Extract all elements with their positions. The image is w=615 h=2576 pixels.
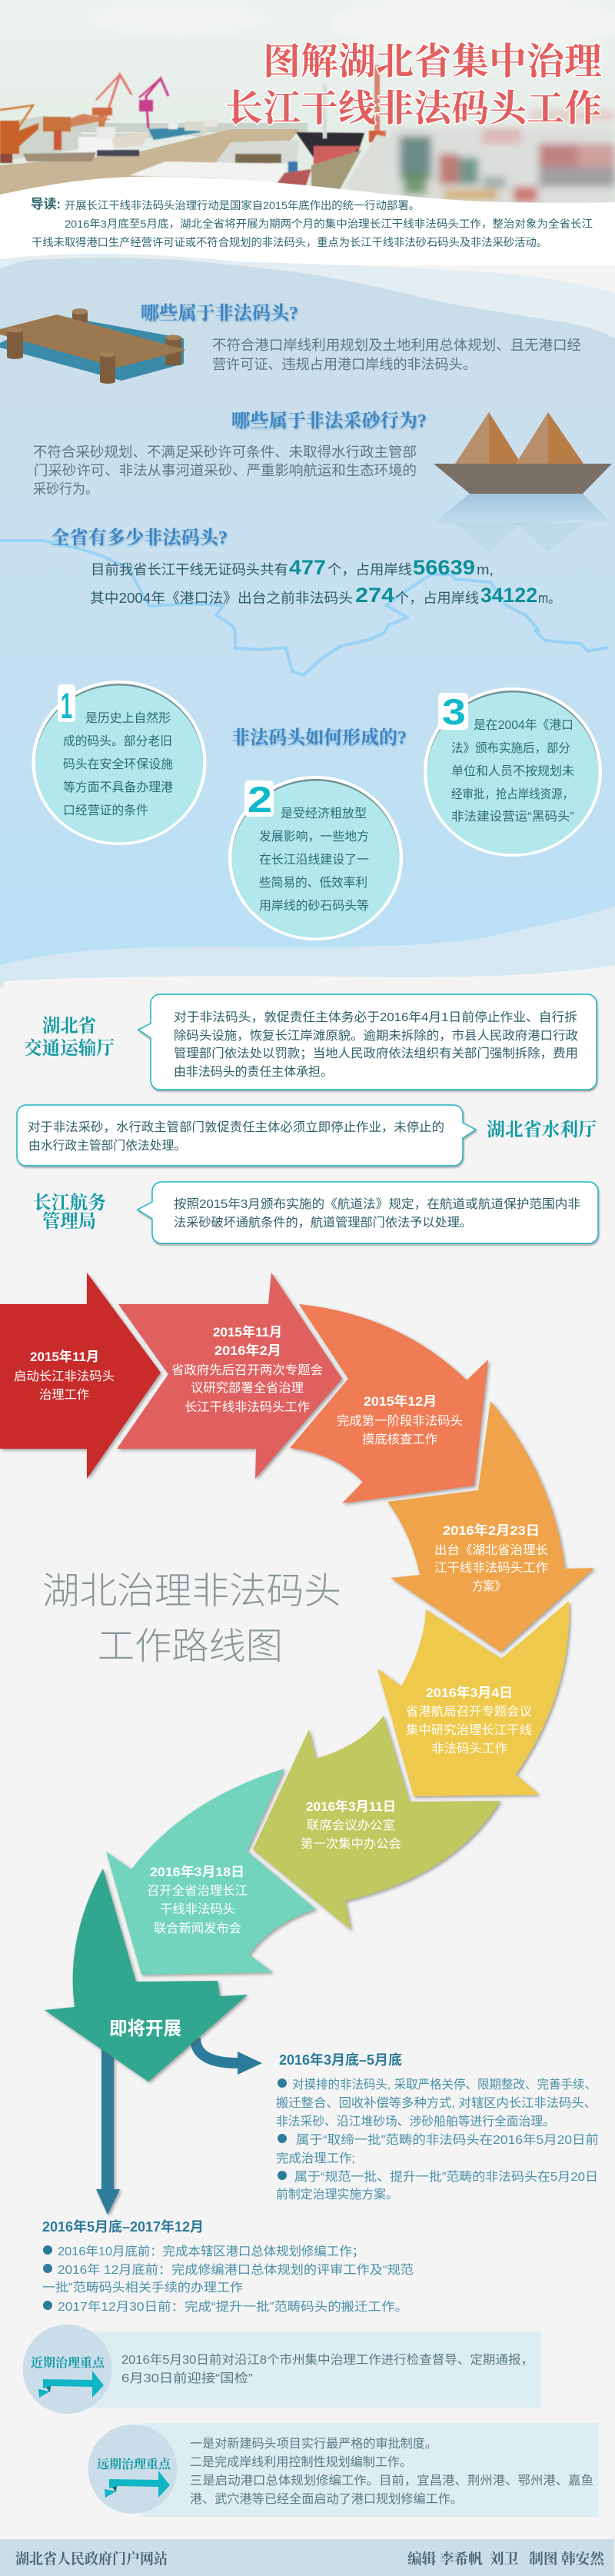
- river map lines: [0, 541, 608, 675]
- arrow step 4: 2016-02-23: [387, 1401, 594, 1652]
- arrow step 2: 2015-11 to 2016-02: 省政府先后召开两次专题会: [171, 1363, 323, 1377]
- circle 1: [32, 681, 206, 845]
- intro text: 2016年3月底至5月底，湖北全省将开展为期两个月的集中治理长江干线非法码头工作，整治对象为全省长江: [65, 218, 593, 230]
- text: statistics: 个，占用岸线: [395, 591, 479, 606]
- heading: how docks formed: 非法码头如何形成的?: [231, 727, 407, 748]
- circle 1: 是历史上自然形: [85, 711, 171, 725]
- title: 长江干线非法码头工作: [225, 88, 602, 129]
- circle 3: 3: [442, 691, 466, 732]
- arrow step 7: 2016-03-18: 召开全省治理长江: [147, 1884, 248, 1898]
- icon: ribbon arrow: [98, 2471, 170, 2498]
- panel: Yangtze navigation bureau: [33, 1182, 598, 1243]
- intro text: 开展长江干线非法码头治理行动是国家自2015年底作出的统一行动部署。: [65, 199, 420, 211]
- list: May 2016 to December 2017 actions: 2016年 12月底前：完成修编港口总体规划的评审工作及“规范: [58, 2263, 414, 2277]
- heading: what are illegal docks: 哪些属于非法码头?: [141, 303, 298, 324]
- panel: transport department: 管理部门依法处以罚款；当地人民政府依法组织有关部门强制拆除，费用: [174, 1047, 578, 1060]
- panel: near-term focus: 近期治理重点: [31, 2355, 105, 2370]
- arrow step 6: 2016-03-11: 第一次集中办公会: [301, 1837, 401, 1851]
- circle 3: 是在2004年《港口: [474, 718, 573, 732]
- arrow step 8: upcoming: [45, 1869, 248, 2082]
- roadmap title: 湖北治理非法码头: [42, 1560, 341, 1614]
- circle 1: 1: [61, 685, 72, 726]
- arrow step 6: 2016-03-11: [253, 1716, 500, 1930]
- list: March to May actions: [276, 2052, 599, 2202]
- list: May 2016 to December 2017 actions: [42, 2218, 414, 2314]
- panel: long-term focus: [88, 2423, 599, 2517]
- circle 3: 经审批，抢占岸线资源，: [451, 787, 573, 801]
- text: statistics: 34122: [480, 584, 537, 607]
- title: [225, 42, 602, 129]
- band between blue panel and grey area: [0, 906, 615, 987]
- text: statistics: 其中2004年《港口法》出台之前非法码头: [90, 591, 353, 606]
- list: March to May actions: 属于“规范一批、提升一批”范畴的非法码头在5月20日: [294, 2170, 598, 2184]
- arrow step 5: 2016-03-04: 省港航局召开专题会议: [406, 1705, 532, 1719]
- list: May 2016 to December 2017 actions: 2016年5月底–2017年12月: [42, 2218, 204, 2235]
- arrow step 6: 2016-03-11: 2016年3月11日: [306, 1799, 396, 1814]
- arrow step 5: 2016-03-04: [377, 1601, 569, 1796]
- arrow step 7: 2016-03-18: 联合新闻发布会: [154, 1922, 241, 1935]
- circle 3: 非法建设营运“黑码头”: [451, 810, 574, 824]
- panel: transport department: 湖北省: [42, 1016, 97, 1037]
- circle 2: 在长江沿线建设了一: [259, 853, 369, 867]
- circle 2: 用岸线的砂石码头等: [259, 899, 369, 913]
- intro text: [31, 197, 593, 248]
- arrow step 4: 2016-02-23: 方案》: [472, 1579, 506, 1593]
- text: statistics: 477: [289, 556, 326, 579]
- title: 图解湖北省集中治理: [263, 42, 602, 82]
- circle 1: 码头在安全环保设施: [63, 757, 173, 771]
- footer: 编辑 李希帆 刘卫 制图 韩安然: [407, 2550, 605, 2568]
- grey lower background: [0, 965, 615, 2576]
- arrow step 1: 2015-11: 治理工作: [39, 1388, 89, 1402]
- panel: transport department: 对于非法码头，敦促责任主体务必于2016年4月1日前停止作业、自行拆: [174, 1010, 577, 1024]
- arrow step 3: 2015-12: [290, 1304, 488, 1503]
- white wave under hero: [0, 177, 615, 265]
- circle 3: 法》颁布实施后，部分: [451, 741, 570, 755]
- footer: [0, 2539, 614, 2576]
- icon: sand boat: [434, 412, 612, 552]
- text: statistics: m。: [538, 591, 560, 606]
- text: statistics: 56639: [413, 556, 475, 579]
- arrow step 4: 2016-02-23: 江干线非法码头工作: [434, 1561, 548, 1575]
- footer: 湖北省人民政府门户网站: [15, 2551, 168, 2568]
- arrow step 5: 2016-03-04: 集中研究治理长江干线: [406, 1723, 532, 1737]
- panel: near-term focus: [23, 2325, 541, 2414]
- panel: near-term focus: 6月30日前迎接“国检”: [121, 2371, 253, 2385]
- heading: how many illegal docks: 全省有多少非法码头?: [51, 528, 228, 548]
- arrow step 1: 2015-11: [0, 1273, 161, 1479]
- text: statistics: 目前我省长江干线无证码头共有: [91, 562, 288, 577]
- circle 2: 发展影响，一些地方: [259, 830, 369, 844]
- panel: long-term focus: 一是对新建码头项目实行最严格的审批制度。: [190, 2437, 437, 2451]
- hero photo: port and river: [0, 0, 615, 208]
- text: illegal sand mining definition: 门采砂许可、非法从事河道采砂、严重影响航运和生态环境的: [34, 463, 417, 478]
- panel: water resources department: 由水行政主管部门依法处理。: [28, 1139, 186, 1153]
- text: illegal sand mining definition: [33, 444, 417, 497]
- arrow step 4: 2016-02-23: 2016年2月23日: [443, 1523, 540, 1538]
- panel: Yangtze navigation bureau: 长江航务: [33, 1193, 106, 1213]
- arrow step 7: 2016-03-18: 干线非法码头: [160, 1902, 235, 1916]
- list: March to May actions: 属于“取缔一批”范畴的非法码头在2016年5月20日前: [296, 2133, 599, 2147]
- icon: ribbon arrow: [32, 2371, 104, 2398]
- panel: long-term focus: 港、武穴港等已经全面启动了港口规划修编工作。: [190, 2492, 463, 2506]
- arrow step 8: upcoming: 即将开展: [109, 2019, 181, 2039]
- arrow step 1: 2015-11: 2015年11月: [30, 1349, 99, 1364]
- panel: water resources department: 对于非法采砂，水行政主管部门敦促责任主体必须立即停止作业，未停止的: [28, 1120, 444, 1134]
- panel: long-term focus: 三是启动港口总体规划修编工作。目前，宜昌港、荆州港、鄂州港、嘉鱼: [190, 2474, 593, 2488]
- text: statistics: [90, 556, 560, 607]
- intro text: 导读:: [31, 197, 61, 211]
- circle 2: 2: [248, 779, 272, 820]
- circle 3: [424, 687, 602, 857]
- arrow step 3: 2015-12: 2015年12月: [364, 1393, 437, 1409]
- text: statistics: m,: [477, 562, 494, 577]
- circle 3: 单位和人员不按规划未: [451, 764, 574, 778]
- arrow step 1: 2015-11: 启动长江非法码头: [14, 1370, 115, 1383]
- roadmap title: 工作路线图: [98, 1616, 283, 1669]
- list: March to May actions: 对摸排的非法码头, 采取严格关停、限期整改、完善手续、: [292, 2078, 597, 2092]
- panel: transport department: [24, 994, 597, 1090]
- panel: long-term focus: 二是完成岸线利用控制性规划编制工作。: [190, 2455, 412, 2469]
- panel: transport department: 交通运输厅: [24, 1038, 115, 1059]
- panel: Yangtze navigation bureau: 法采砂破坏通航条件的，航道管理部门依法予以处理。: [174, 1216, 472, 1230]
- arrow step 2: 2015-11 to 2016-02: [117, 1273, 342, 1479]
- arrow step 7: 2016-03-18: [106, 1769, 316, 1975]
- list: March to May actions: 前制定治理实施方案。: [276, 2188, 398, 2202]
- list: March to May actions: 非法采砂、沿江堆砂场、涉砂船舶等进行全面治理。: [276, 2115, 555, 2128]
- arrow step 7: 2016-03-18: 2016年3月18日: [150, 1864, 244, 1879]
- text: illegal dock definition: [212, 338, 581, 372]
- heading: illegal sand mining: 哪些属于非法采砂行为?: [231, 411, 427, 431]
- list: May 2016 to December 2017 actions: 2016年10月底前：完成本辖区港口总体规划修编工作；: [58, 2245, 364, 2258]
- arrow step 5: 2016-03-04: 2016年3月4日: [426, 1685, 513, 1700]
- circle 1: 口经营证的条件: [63, 804, 148, 817]
- circle 1: 成的码头。部分老旧: [63, 734, 172, 748]
- arrow step 4: 2016-02-23: 出台《湖北省治理长: [434, 1543, 548, 1557]
- circle 2: 是受经济粗放型: [281, 807, 367, 820]
- blurred container yard: [388, 110, 615, 208]
- panel: Yangtze navigation bureau: 管理局: [42, 1211, 96, 1232]
- circle 1: 等方面不具备办理港: [63, 780, 173, 794]
- panel: near-term focus: 2016年5月30日前对沿江8个市州集中治理工作进行检查督导、定期通报，: [121, 2353, 534, 2367]
- list: March to May actions: 2016年3月底–5月底: [279, 2052, 402, 2068]
- arrow step 2: 2015-11 to 2016-02: 议研究部署全省治理: [191, 1381, 304, 1395]
- arrow step 2: 2015-11 to 2016-02: 2016年2月: [214, 1343, 281, 1358]
- arrow step 3: 2015-12: 完成第一阶段非法码头: [337, 1414, 463, 1428]
- icon: dock: [0, 308, 186, 384]
- arrow step 2: 2015-11 to 2016-02: 2015年11月: [213, 1324, 282, 1340]
- arrow step 5: 2016-03-04: 非法码头工作: [431, 1742, 507, 1756]
- list: March to May actions: 搬迁整合、回收补偿等多种方式, 对辖区内长江非法码头、: [276, 2096, 597, 2110]
- circle 2: 些简易的、低效率利: [259, 876, 367, 890]
- panel: water resources department: [17, 1105, 597, 1166]
- arrow step 2: 2015-11 to 2016-02: 长江干线非法码头工作: [184, 1400, 310, 1414]
- list: May 2016 to December 2017 actions: 一批”范畴码头相关手续的办理工作: [42, 2281, 243, 2295]
- list: March to May actions: 完成治理工作;: [276, 2152, 355, 2165]
- text: illegal sand mining definition: 不符合采砂规划、不满足采砂许可条件、未取得水行政主管部: [33, 444, 417, 460]
- text: illegal sand mining definition: 采砂行为。: [33, 481, 98, 497]
- panel: Yangtze navigation bureau: 按照2015年3月颁布实施的《航道法》规定，在航道或航道保护范围内非: [174, 1197, 580, 1211]
- blue background panel: [0, 254, 615, 992]
- straight blue arrow to long-term list: [96, 2045, 120, 2215]
- list: May 2016 to December 2017 actions: 2017年12月30日前：完成“提升一批”范畴码头的搬迁工作。: [58, 2300, 408, 2314]
- arrow step 3: 2015-12: 摸底核查工作: [362, 1433, 437, 1446]
- curved blue arrow to near-term list: [195, 2038, 262, 2075]
- circle 2: [228, 776, 403, 940]
- text: statistics: 274: [355, 584, 394, 607]
- panel: water resources department: 湖北省水利厅: [487, 1120, 597, 1140]
- panel: transport department: 除码头设施，恢复长江岸滩原貌。逾期未拆除的，市县人民政府港口行政: [174, 1029, 578, 1043]
- intro text: 干线未取得港口生产经营许可证或不符合规划的非法码头，重点为长江干线非法砂石码头及非法采砂活动。: [32, 236, 547, 248]
- text: illegal dock definition: 不符合港口岸线利用规划及土地利用总体规划、且无港口经: [212, 338, 581, 353]
- arrow step 6: 2016-03-11: 联席会议办公室: [307, 1819, 395, 1832]
- roadmap title: [42, 1560, 341, 1669]
- panel: transport department: 由非法码头的责任主体承担。: [174, 1065, 333, 1079]
- text: illegal dock definition: 营许可证、违规占用港口岸线的非法码头。: [212, 357, 477, 372]
- panel: long-term focus: 远期治理重点: [97, 2457, 171, 2471]
- text: statistics: 个，占用岸线: [327, 562, 412, 577]
